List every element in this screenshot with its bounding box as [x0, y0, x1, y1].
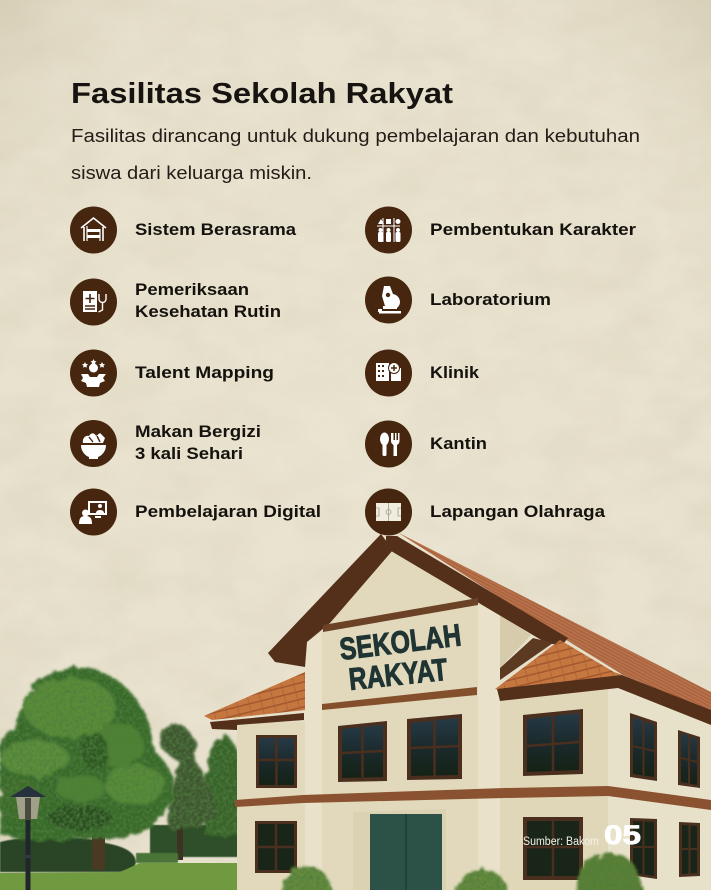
- gable recess side: [500, 615, 531, 668]
- distant tree line: [150, 825, 240, 857]
- facility list: left column: [70, 206, 321, 536]
- item: Pemeriksaan Kesehatan Rutin: Kesehatan Rutin: [135, 302, 281, 321]
- sign text: [338, 617, 463, 697]
- right wing fascia: [497, 675, 711, 725]
- lawn: [0, 863, 237, 890]
- title: Fasilitas Sekolah Rakyat: [71, 78, 453, 110]
- right wing side wall: [608, 688, 711, 890]
- page number: 05: [604, 820, 641, 850]
- right wing front wall: [500, 688, 608, 890]
- door surround: [353, 809, 446, 890]
- item: Talent Mapping: Talent Mapping: [135, 363, 274, 382]
- upper band: [323, 598, 478, 632]
- intro text: Fasilitas dirancang untuk dukung pembelajaran dan kebutuhan: [71, 126, 640, 146]
- item: Makan Bergizi 3 kali Sehari: [70, 420, 261, 467]
- left wing roof: [204, 672, 305, 730]
- item: Pemeriksaan Kesehatan Rutin: [70, 278, 281, 326]
- item: Lapangan Olahraga: Lapangan Olahraga: [430, 502, 606, 521]
- garden scene: lawn, hedge and trees: [0, 667, 240, 890]
- main roof right slope: [397, 532, 711, 712]
- school building: [204, 532, 711, 890]
- large leafy tree: [0, 667, 174, 870]
- item: Laboratorium: [365, 276, 551, 324]
- intro text: [71, 126, 640, 183]
- item: Sistem Berasrama: Sistem Berasrama: [135, 220, 297, 239]
- door: [370, 814, 442, 890]
- item: Laboratorium: Laboratorium: [430, 290, 551, 309]
- floor band: [235, 786, 711, 810]
- item: Makan Bergizi 3 kali Sehari: 3 kali Sehari: [135, 444, 243, 463]
- item: Kantin: [365, 420, 487, 468]
- item: Lapangan Olahraga: [365, 488, 606, 536]
- item: Pemeriksaan Kesehatan Rutin: Pemeriksaan: [135, 280, 249, 299]
- lower front roof: [495, 638, 623, 690]
- facility list: right column: [365, 206, 636, 536]
- item: Pembentukan Karakter: [365, 206, 636, 254]
- main roof fascia left: [268, 534, 393, 667]
- left wing wall: [237, 722, 307, 890]
- item: Talent Mapping: [70, 350, 274, 396]
- sign text: SEKOLAH: [338, 617, 463, 667]
- item: Kantin: Kantin: [430, 434, 487, 453]
- item: Pembentukan Karakter: Pembentukan Karakter: [430, 220, 636, 239]
- lower windows: [255, 817, 700, 880]
- item: Makan Bergizi 3 kali Sehari: Makan Bergizi: [135, 422, 261, 441]
- item: Klinik: Klinik: [430, 363, 480, 382]
- upper windows: [256, 709, 700, 788]
- bushes: [284, 853, 643, 890]
- central gable wall: [305, 550, 500, 890]
- sign text: RAKYAT: [347, 652, 449, 697]
- item: Pembelajaran Digital: Pembelajaran Digital: [135, 502, 321, 521]
- intro text: siswa dari keluarga miskin.: [71, 163, 312, 183]
- item: Klinik: [365, 350, 480, 396]
- entrance pilaster shading: [305, 632, 322, 890]
- right background tree: [205, 735, 240, 835]
- hedge: [0, 837, 136, 872]
- item: Sistem Berasrama: [70, 206, 297, 254]
- pine tree: [158, 723, 216, 860]
- item: Pembelajaran Digital: [70, 488, 321, 536]
- lower sign band: [322, 687, 477, 710]
- source credit: Sumber: Bakom: [523, 836, 599, 848]
- main roof fascia right: [386, 536, 568, 644]
- street lamp: [10, 786, 46, 890]
